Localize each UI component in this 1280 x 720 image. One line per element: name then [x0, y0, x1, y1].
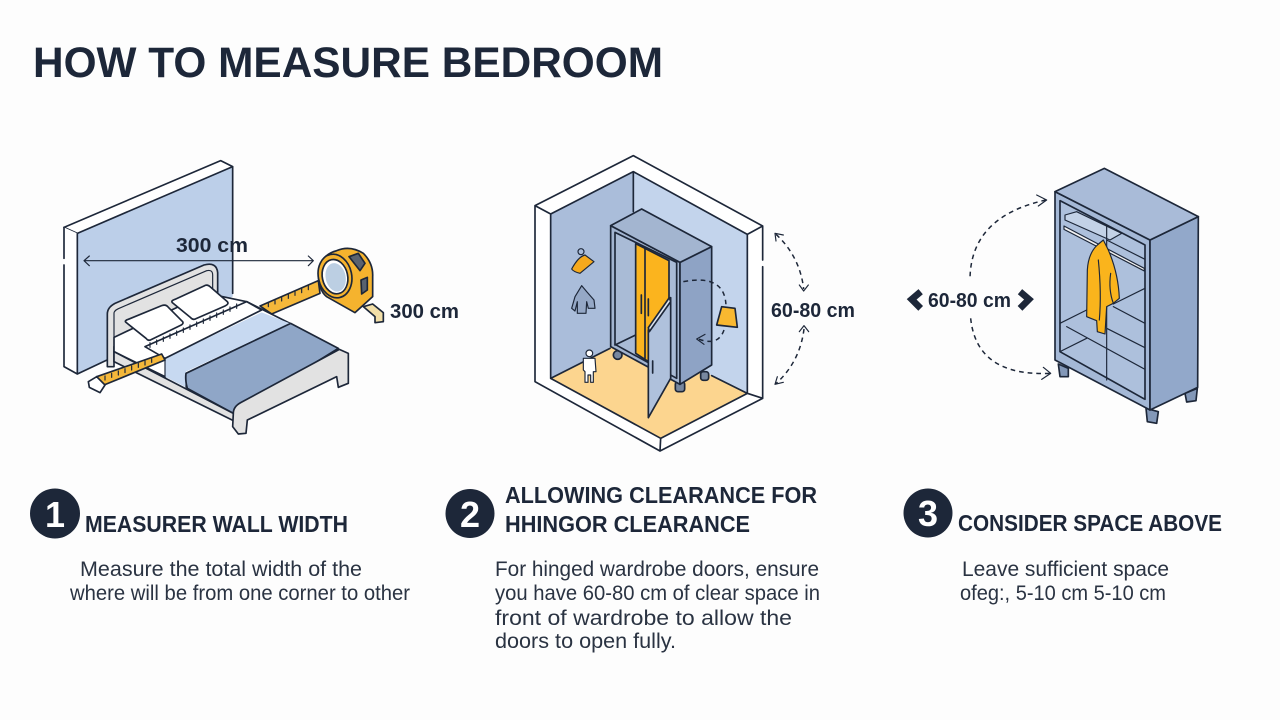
- heading 3: CONSIDER SPACE ABOVE: [958, 510, 1222, 536]
- heading 1: MEASURER WALL WIDTH: [85, 511, 348, 537]
- chevrons: [912, 292, 1029, 308]
- body 1: Measure the total width of the: [80, 558, 362, 581]
- heading 2: HHINGOR CLEARANCE: [505, 511, 750, 537]
- label: door clearance: 60-80 cm: [771, 300, 855, 322]
- wardrobe: [611, 209, 712, 418]
- hanging rail: [1064, 226, 1144, 271]
- body 3: [960, 558, 1169, 605]
- icon: shirt: [572, 286, 595, 313]
- body 3: Leave sufficient space: [962, 558, 1169, 581]
- title: HOW TO MEASURE BEDROOM: [33, 39, 663, 87]
- body 2: doors to open fully.: [495, 630, 676, 653]
- body 1: where will be from one corner to other: [69, 582, 410, 605]
- badge 3: [904, 488, 952, 538]
- body 2: For hinged wardrobe doors, ensure: [495, 558, 819, 581]
- illustration: bed and wall measurement: [64, 161, 383, 434]
- swing arrowhead: [697, 334, 705, 344]
- door swing arrow: [683, 280, 726, 341]
- icon: person: [583, 350, 596, 382]
- body 1: [69, 558, 410, 605]
- badge 3: 3: [918, 493, 938, 534]
- illustration: wardrobe interior: [912, 168, 1198, 423]
- badge 2: [446, 489, 494, 538]
- badge 1: 1: [45, 494, 65, 535]
- open door: [648, 298, 671, 418]
- icon: lamp: [717, 307, 737, 327]
- clearance arcs: [970, 195, 1051, 379]
- heading 2: [505, 482, 817, 537]
- clearance arrows: [775, 233, 809, 384]
- badge 1: [30, 488, 80, 538]
- illustration: room with wardrobe door clearance: [535, 156, 809, 451]
- wall: [64, 161, 233, 374]
- room shell: [535, 156, 763, 451]
- cabinet: [1055, 168, 1198, 410]
- step 1: [30, 488, 410, 605]
- step 2: [446, 482, 820, 653]
- badge 2: 2: [460, 494, 480, 535]
- icon: tape measure body: [314, 248, 383, 323]
- body 2: you have 60-80 cm of clear space in: [495, 582, 820, 605]
- body 2: front of wardrobe to allow the: [495, 607, 792, 630]
- garment: [1087, 240, 1119, 334]
- feet: [1058, 364, 1197, 423]
- heading 2: ALLOWING CLEARANCE FOR: [505, 482, 817, 508]
- width arrow: [84, 256, 313, 266]
- label: wardrobe clearance: 60-80 cm: [928, 290, 1011, 312]
- label: wall width: 300 cm: [176, 235, 248, 257]
- body 3: ofeg:, 5-10 cm 5-10 cm: [960, 582, 1166, 605]
- icon: hanger: [572, 249, 594, 273]
- step 3: [904, 488, 1222, 605]
- label: tape reading: 300 cm: [390, 301, 459, 323]
- body 2: [495, 558, 820, 653]
- garment folds: [1098, 260, 1113, 320]
- bed: [107, 264, 348, 434]
- measuring tape: [88, 281, 320, 393]
